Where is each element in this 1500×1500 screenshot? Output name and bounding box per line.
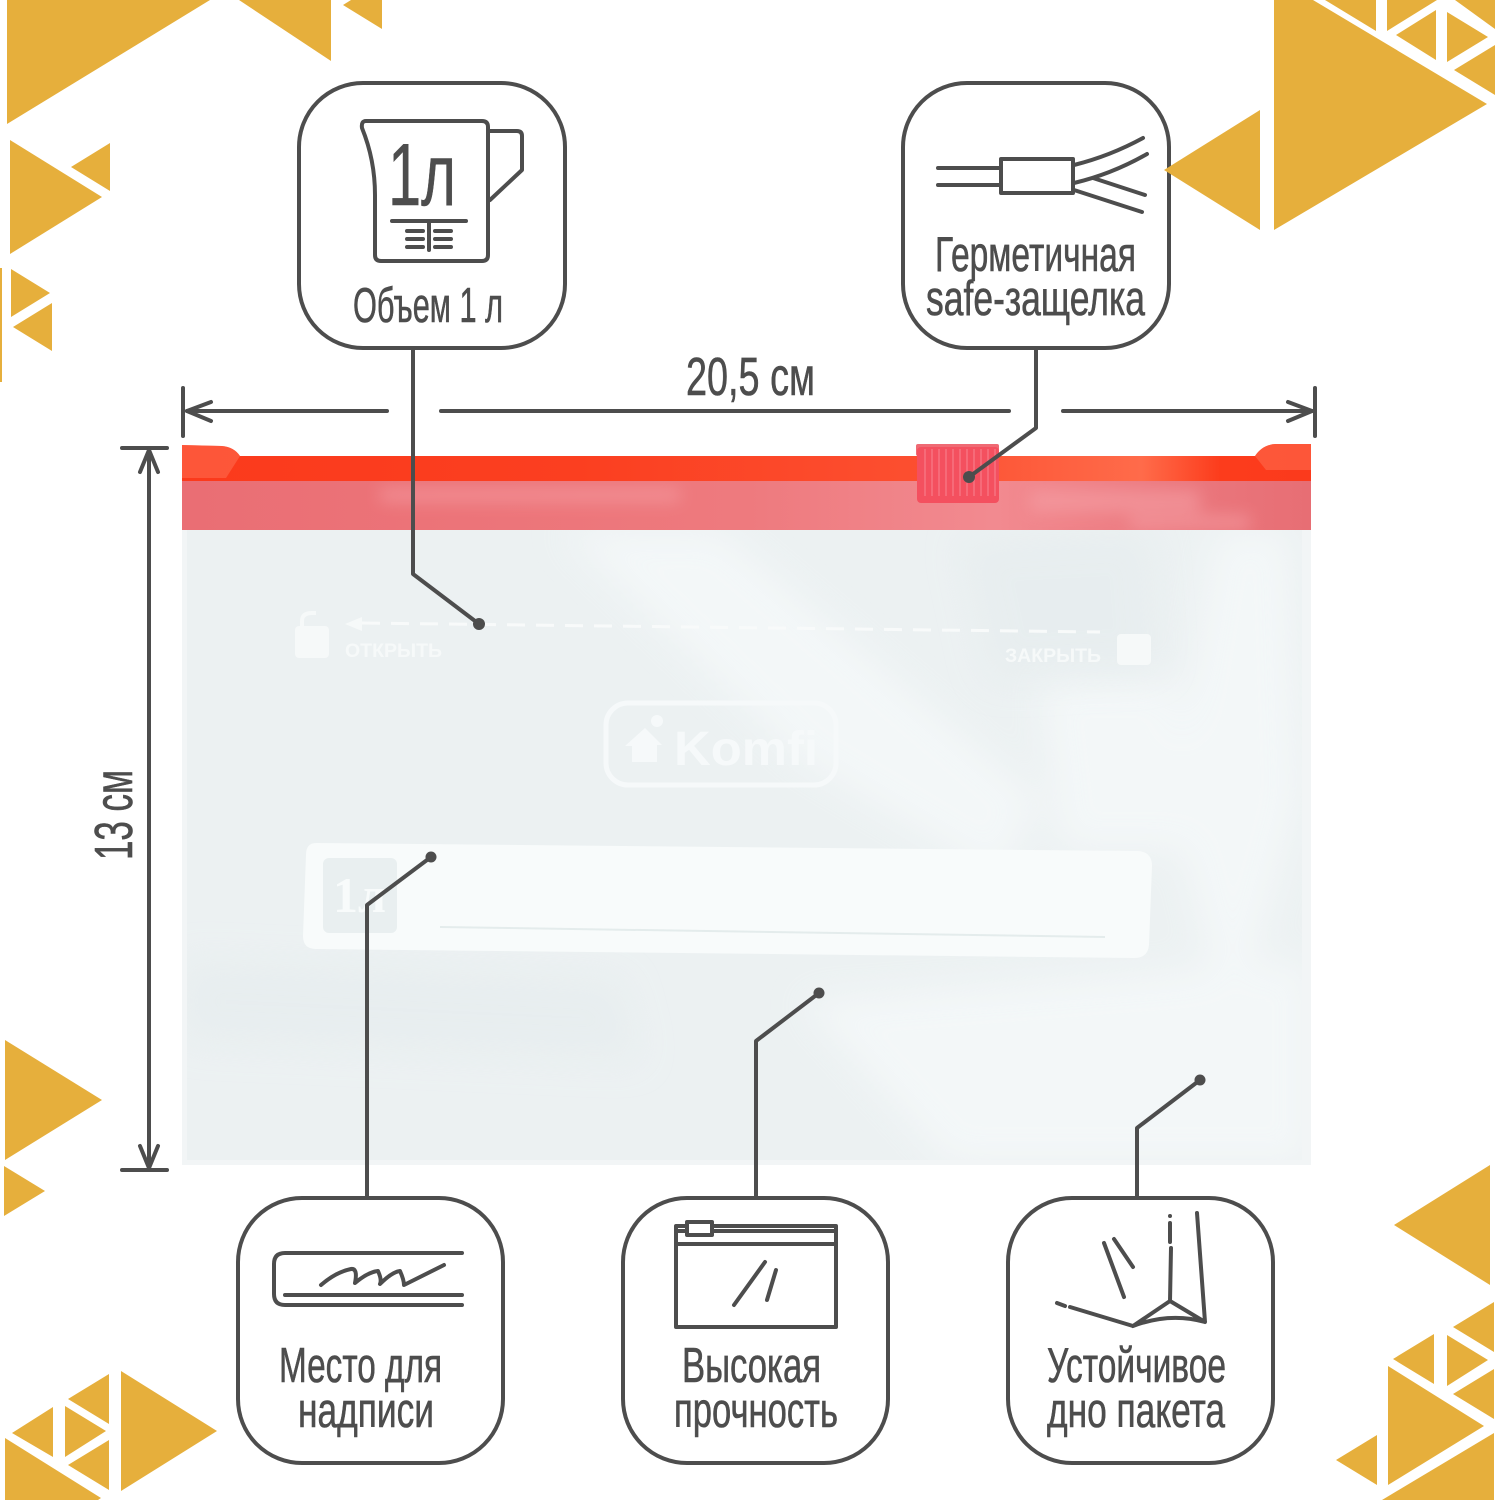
text: high strength: Высокая	[682, 1339, 821, 1393]
text: high strength	[674, 1339, 838, 1438]
flap highlights	[380, 488, 1250, 530]
height dimension arrow	[122, 448, 167, 1170]
icon: seal wires	[938, 138, 1147, 212]
panel: writing area	[238, 1198, 503, 1463]
text: volume: Объем 1 л	[353, 279, 503, 333]
icon: measuring jug	[362, 121, 522, 261]
text: airtight seal	[926, 228, 1146, 326]
callout leader: volume	[413, 348, 485, 630]
text: stable bottom	[1047, 1339, 1226, 1438]
decorative triangle overlapping seal panel	[1164, 110, 1260, 230]
text: writing area: надписи	[298, 1384, 434, 1438]
red zip strip	[182, 444, 1311, 481]
callout leader: stable bottom	[1137, 1074, 1206, 1197]
text: airtight seal: Герметичная	[935, 228, 1136, 282]
height label: 13 см	[84, 770, 144, 860]
width dimension arrow	[183, 388, 1315, 436]
zip tab texture	[182, 444, 1311, 478]
decorative triangles: left middle	[4, 1040, 102, 1216]
callout leader: strength	[756, 988, 824, 1197]
decorative triangles: bottom right	[1336, 1165, 1494, 1500]
callout leader: label area	[367, 852, 436, 1197]
decorative triangles: top left	[0, 0, 382, 382]
embossed open and close markings	[295, 613, 1151, 667]
label area: 1л	[333, 867, 386, 923]
callout leader: seal	[963, 348, 1036, 483]
embossed open and close markings: ОТКРЫТЬ	[345, 641, 442, 662]
text: stable bottom: дно пакета	[1047, 1384, 1226, 1438]
icon: bag with slider	[676, 1222, 836, 1327]
panel: airtight safe seal	[903, 83, 1169, 348]
label area	[303, 843, 1152, 958]
text: writing area: Место для	[279, 1339, 442, 1393]
text: stable bottom: Устойчивое	[1047, 1339, 1226, 1393]
width label: 20,5 см	[686, 347, 815, 407]
text: airtight seal: safe-защелка	[926, 272, 1146, 326]
icon: stand-up bag bottom	[1057, 1213, 1205, 1326]
panel: volume 1 l	[299, 83, 565, 348]
zip bag photo	[182, 444, 1311, 1165]
embossed open and close markings: ЗАКРЫТЬ	[1005, 646, 1101, 667]
panel: high strength	[623, 1198, 888, 1463]
bag body	[182, 530, 1311, 1165]
text: high strength: прочность	[674, 1384, 838, 1438]
panel: stable bottom	[1008, 1198, 1273, 1463]
decorative triangles: bottom left	[5, 1371, 217, 1500]
zip slider	[916, 444, 999, 503]
icon: measuring jug: 1л	[388, 125, 456, 224]
red flap	[182, 480, 1311, 530]
embossed Komfi logo: Komfi	[674, 723, 818, 776]
text: writing area	[279, 1339, 442, 1438]
embossed Komfi logo	[606, 703, 836, 785]
icon: writing strip	[274, 1253, 462, 1305]
decorative triangles: top right	[1274, 0, 1495, 230]
